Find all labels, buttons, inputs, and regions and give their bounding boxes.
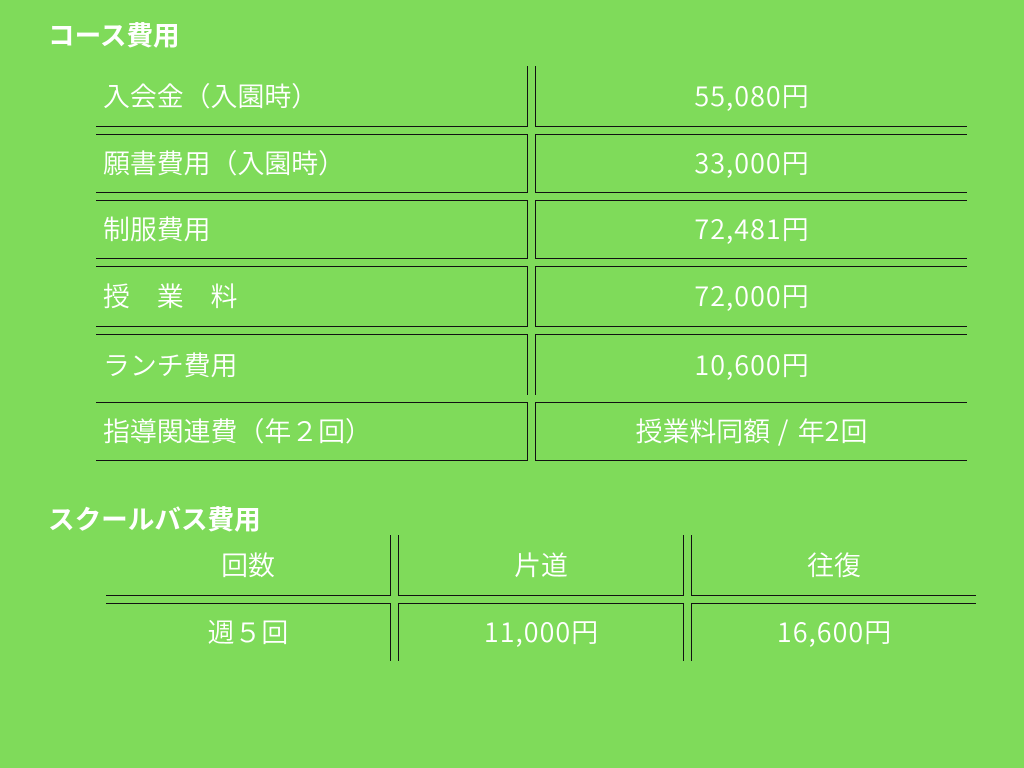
- row: bus fares: 円: [864, 611, 891, 650]
- row: uniform fee: 制服費用: [103, 208, 211, 247]
- row: bus fares: 円: [571, 611, 598, 650]
- row: bus fares: 16,600: [777, 611, 864, 650]
- row: bus header: 片道: [514, 544, 568, 582]
- row: bus fares: 11,000: [484, 611, 571, 650]
- row: guidance fee: 2: [825, 410, 840, 449]
- row: enrollment fee: [96, 66, 967, 127]
- row: tuition: 授 業 料: [103, 275, 237, 314]
- heading: course fees: コース費用: [48, 14, 180, 53]
- row: tuition: [96, 266, 967, 327]
- heading: school bus fees: スクールバス費用: [48, 498, 261, 537]
- row: guidance fee: 指導関連費（年２回）: [103, 410, 372, 449]
- row: bus header: 往復: [807, 544, 861, 582]
- row: guidance fee: [96, 402, 967, 461]
- table: course fees: [96, 66, 967, 461]
- row: guidance fee: 授業料同額 年 回: [636, 410, 867, 449]
- row: bus fares: [106, 603, 976, 661]
- row: guidance fee: /: [778, 410, 790, 449]
- row: uniform fee: [96, 200, 967, 259]
- row: bus header: [106, 535, 976, 596]
- row: enrollment fee: 円: [782, 74, 809, 114]
- row: lunch fee: [96, 334, 967, 395]
- row: enrollment fee: 55,080: [694, 74, 782, 114]
- row: bus header: 回数: [221, 544, 275, 582]
- row: uniform fee: 円: [782, 208, 809, 247]
- row: bus fares: 週５回: [208, 611, 288, 650]
- row: lunch fee: 円: [782, 344, 809, 382]
- row: enrollment fee: 入会金（入園時）: [103, 74, 318, 114]
- row: tuition: 72,000: [694, 275, 782, 314]
- row: tuition: 円: [782, 275, 809, 314]
- row: application fee: 33,000: [694, 142, 782, 181]
- row: lunch fee: 10,600: [694, 344, 782, 382]
- row: lunch fee: ランチ費用: [103, 344, 237, 382]
- row: uniform fee: 72,481: [694, 208, 782, 247]
- row: application fee: [96, 134, 967, 193]
- row: application fee: 円: [782, 142, 809, 181]
- row: application fee: 願書費用（入園時）: [103, 142, 345, 181]
- table: school bus fees: [106, 535, 976, 661]
